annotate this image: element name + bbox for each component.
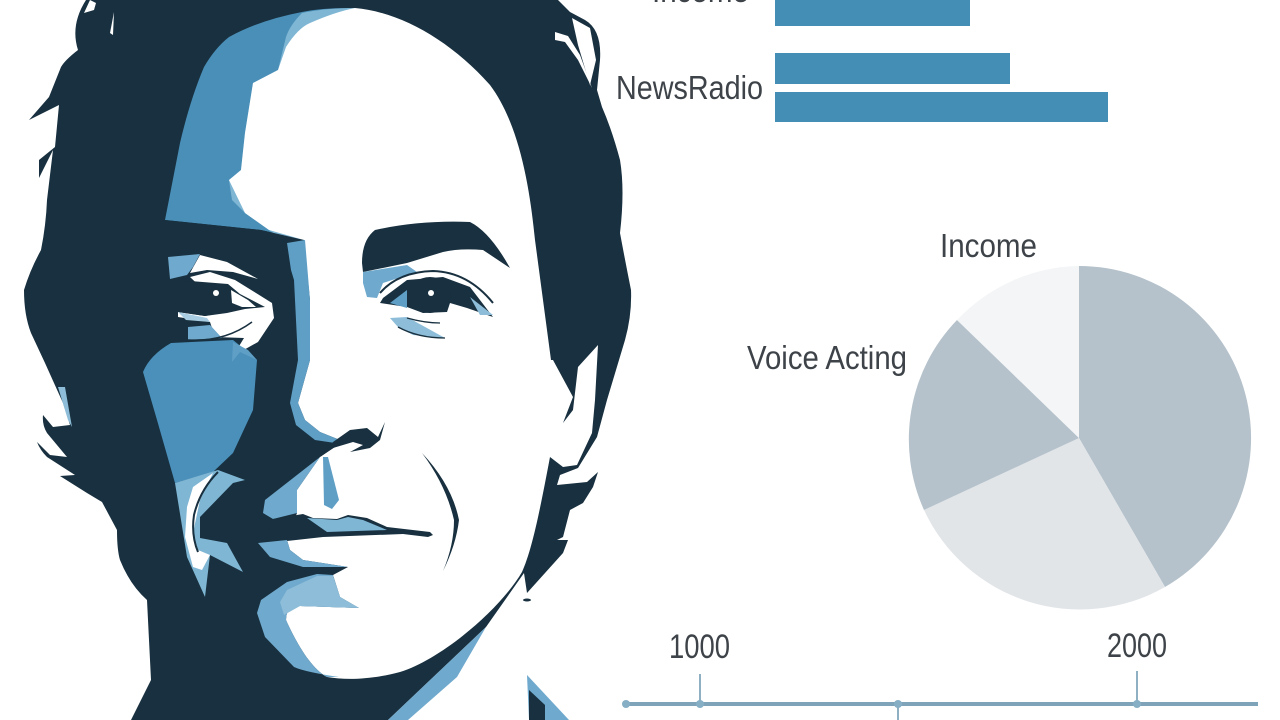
lower lip shadow [258, 540, 348, 567]
chin shadow [257, 574, 359, 677]
eyebrow left [165, 220, 304, 360]
curl slit [572, 18, 596, 85]
outer eye blue [470, 297, 493, 315]
pie chart [747, 227, 1251, 609]
socket shadow [168, 254, 200, 279]
forehead shadow [165, 8, 350, 240]
right curl [555, 32, 592, 88]
pie slice large [1079, 266, 1251, 587]
lower hair mark [523, 598, 531, 602]
left strand [110, 12, 114, 35]
nose side strip [287, 240, 340, 443]
label: Voice Acting: Voice Acting [747, 339, 907, 376]
lower lid strip [178, 312, 210, 322]
mouth [258, 514, 433, 567]
face highlight [229, 8, 551, 679]
left cheek shadow [143, 340, 257, 483]
nostril [320, 422, 385, 457]
hair and neck silhouette [24, 0, 631, 720]
inner eye blue [390, 290, 407, 308]
eye shape [380, 277, 493, 317]
right eyebrow [362, 222, 510, 272]
forehead light edge [229, 8, 355, 245]
collar blue [527, 675, 569, 720]
upper lip light [307, 517, 387, 532]
right side hair channel [549, 345, 598, 467]
lid line [380, 271, 493, 303]
label: NewsRadio: NewsRadio [616, 69, 763, 106]
bar chart [616, 0, 1108, 122]
top left strand [84, 0, 96, 13]
chin shadow light [280, 576, 359, 615]
timeline axis [626, 702, 1258, 706]
lips dark [265, 514, 433, 541]
right eye [363, 265, 493, 338]
pie slice bottom [924, 438, 1165, 609]
crease dark line [193, 472, 218, 552]
crease blue upper [175, 470, 245, 597]
timeline start dot [622, 700, 630, 708]
eye surround highlight [178, 272, 274, 356]
tick middle [894, 700, 902, 720]
left eye [168, 254, 274, 356]
collar [527, 675, 569, 720]
smile line [422, 453, 459, 571]
bar: Income [775, 0, 970, 26]
tick 2000: 2000 [1107, 627, 1167, 665]
cheek fold blue [188, 325, 222, 340]
left neck strand [58, 387, 72, 427]
catchlight [213, 290, 219, 296]
pie slice left [909, 320, 1079, 510]
iris [409, 277, 451, 313]
bar: NewsRadio upper [775, 53, 1010, 84]
crease white [185, 473, 213, 570]
tick 2000 [1107, 627, 1167, 708]
under-eye lines [398, 318, 445, 338]
lower crease [188, 322, 252, 340]
cheek crease [175, 470, 245, 597]
hair highlights [58, 0, 596, 602]
cheek light patch [232, 342, 257, 362]
under-eye shadow [390, 317, 445, 338]
tick 1000: 1000 [669, 628, 730, 666]
philtrum shadow [323, 457, 339, 509]
neck highlight [388, 627, 486, 720]
under-nose shadow [263, 457, 320, 519]
pie slice top [957, 266, 1079, 438]
catchlight [428, 290, 434, 296]
label: Income: Income [940, 227, 1037, 264]
socket highlight [190, 255, 258, 279]
tick 1000 [669, 628, 730, 708]
portrait illustration [24, 0, 631, 720]
eye almond [170, 281, 265, 316]
collar dark [529, 690, 545, 720]
sclera [231, 290, 256, 307]
timeline [622, 627, 1258, 720]
bar: NewsRadio lower [775, 92, 1108, 122]
socket shadow [363, 265, 417, 298]
